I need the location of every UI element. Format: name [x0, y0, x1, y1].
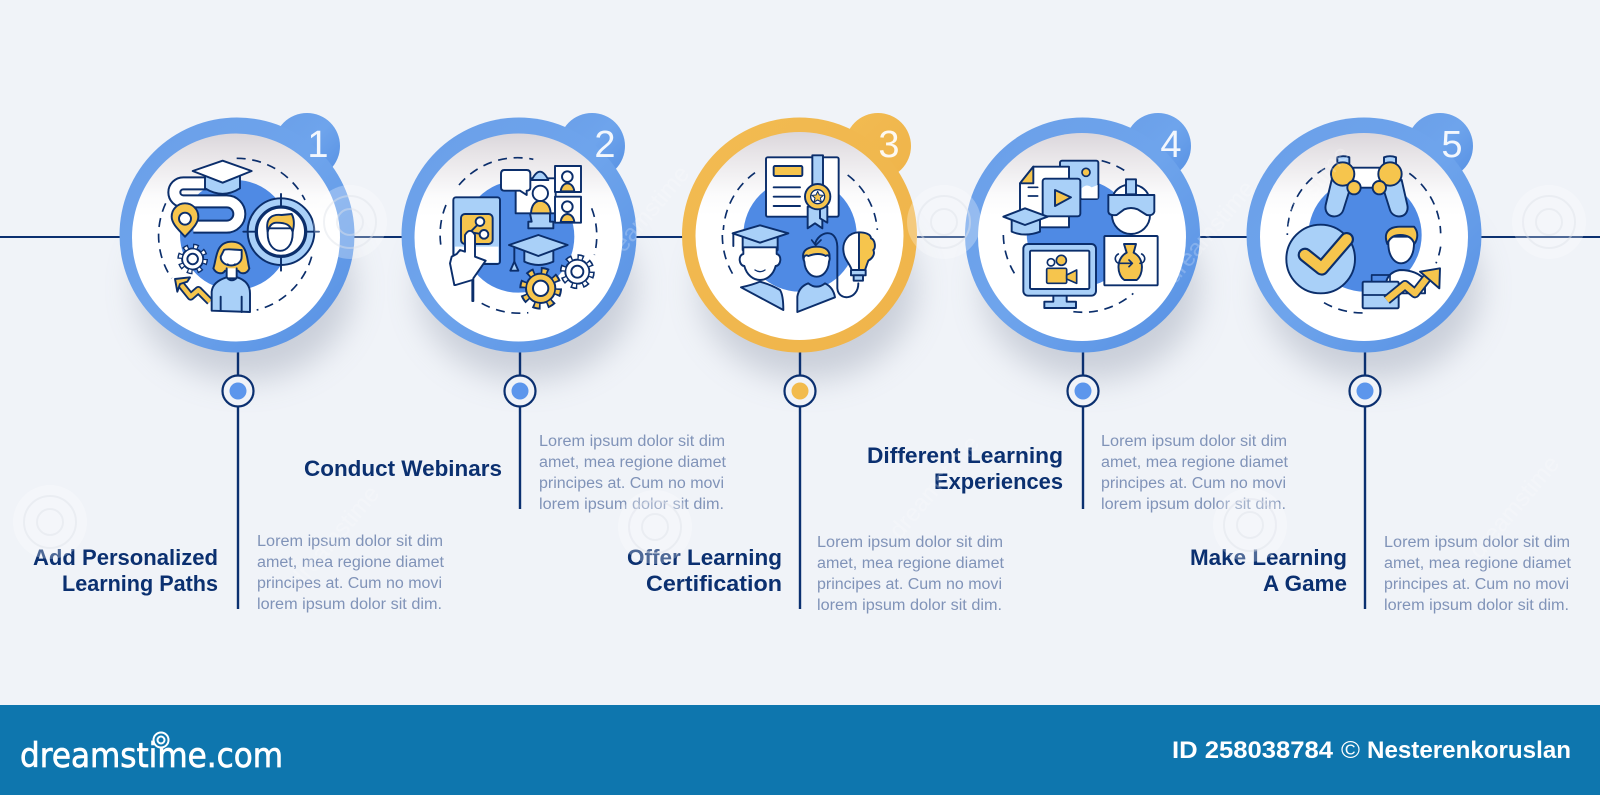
footer credit: Nesterenkoruslan	[1367, 737, 1571, 764]
watermark overlay: dreamstime	[884, 430, 985, 544]
circle shadow	[1264, 196, 1480, 380]
number 2: 2	[594, 124, 616, 166]
footer credit: ©	[1341, 737, 1360, 764]
connector and marker	[222, 350, 254, 609]
description	[817, 534, 1005, 614]
description: Lorem ipsum dolor sit dim	[817, 534, 1003, 551]
description: Lorem ipsum dolor sit dim	[539, 433, 725, 450]
panel: step 5	[1190, 113, 1572, 614]
description: lorem ipsum dolor sit dim.	[539, 496, 724, 513]
number 5: 5	[1441, 124, 1463, 166]
description: lorem ipsum dolor sit dim.	[257, 596, 442, 613]
description: Lorem ipsum dolor sit dim	[1101, 433, 1287, 450]
description: lorem ipsum dolor sit dim.	[1384, 597, 1569, 614]
watermark overlay: dreamstime	[594, 160, 695, 274]
ring and badge	[120, 113, 354, 352]
icon: certificate, graduates, idea	[722, 155, 877, 312]
ring and badge	[682, 113, 917, 352]
description: principes at. Cum no movi	[817, 576, 1002, 593]
heading	[867, 443, 1063, 494]
number 4: 4	[1160, 124, 1182, 166]
number 3: 3	[878, 124, 900, 166]
connector and marker	[504, 350, 536, 509]
footer band	[0, 705, 1600, 795]
icon: media, VR, monitor	[1003, 161, 1158, 312]
ring and badge	[402, 113, 636, 352]
description: amet, mea regione diamet	[1101, 454, 1289, 471]
description	[257, 533, 445, 613]
panel: step 1	[33, 113, 445, 613]
heading	[1190, 545, 1347, 596]
ring and badge	[965, 113, 1200, 352]
heading: Offer Learning	[627, 545, 782, 570]
panel: step 3	[627, 113, 1005, 614]
heading: Different Learning	[867, 443, 1063, 468]
watermark overlay: dreamstime	[1159, 175, 1260, 289]
icon: controller, check, career	[1286, 156, 1441, 313]
connector and marker	[1350, 350, 1380, 609]
description	[539, 433, 727, 513]
heading: Make Learning	[1190, 545, 1347, 570]
watermark overlay: dreamstime	[1464, 450, 1565, 564]
watermark overlay: dreamstime	[1254, 140, 1355, 254]
footer credit: ID 258038784	[1172, 737, 1334, 764]
horizontal timeline line	[0, 236, 1600, 238]
description: Lorem ipsum dolor sit dim	[257, 533, 443, 550]
connector and marker	[1068, 350, 1098, 509]
panel: step 4	[867, 113, 1289, 513]
heading: Certification	[646, 571, 782, 596]
number 1: 1	[307, 124, 329, 166]
circle shadow	[983, 196, 1199, 380]
footer logo: dreamstime.com	[20, 736, 283, 776]
heading: A Game	[1263, 571, 1347, 596]
description: principes at. Cum no movi	[1384, 576, 1569, 593]
description: lorem ipsum dolor sit dim.	[1101, 496, 1286, 513]
heading: Add Personalized	[33, 545, 218, 570]
heading: Learning Paths	[62, 571, 218, 596]
footer credit	[1172, 737, 1571, 764]
description: amet, mea regione diamet	[539, 454, 727, 471]
heading	[627, 545, 782, 596]
watermark overlay: dreamstime	[284, 480, 385, 594]
heading	[33, 545, 218, 596]
heading: Experiences	[934, 469, 1063, 494]
description	[1101, 433, 1289, 513]
panel: step 2	[304, 113, 727, 513]
description: lorem ipsum dolor sit dim.	[817, 597, 1002, 614]
connector and marker	[784, 350, 816, 609]
heading: Conduct Webinars	[304, 456, 502, 481]
icon: learning path, target, student	[159, 158, 319, 312]
description: principes at. Cum no movi	[257, 575, 442, 592]
circle shadow	[700, 196, 916, 380]
description: amet, mea regione diamet	[817, 555, 1005, 572]
description: principes at. Cum no movi	[539, 475, 724, 492]
icon: webinar, tablet, cap, gears	[440, 158, 597, 313]
circle shadow	[137, 196, 353, 380]
description: principes at. Cum no movi	[1101, 475, 1286, 492]
description	[1384, 534, 1572, 614]
description: amet, mea regione diamet	[257, 554, 445, 571]
description: Lorem ipsum dolor sit dim	[1384, 534, 1570, 551]
description: amet, mea regione diamet	[1384, 555, 1572, 572]
watermark overlay	[13, 140, 1586, 594]
ring and badge	[1246, 113, 1482, 352]
circle shadow	[419, 196, 635, 380]
